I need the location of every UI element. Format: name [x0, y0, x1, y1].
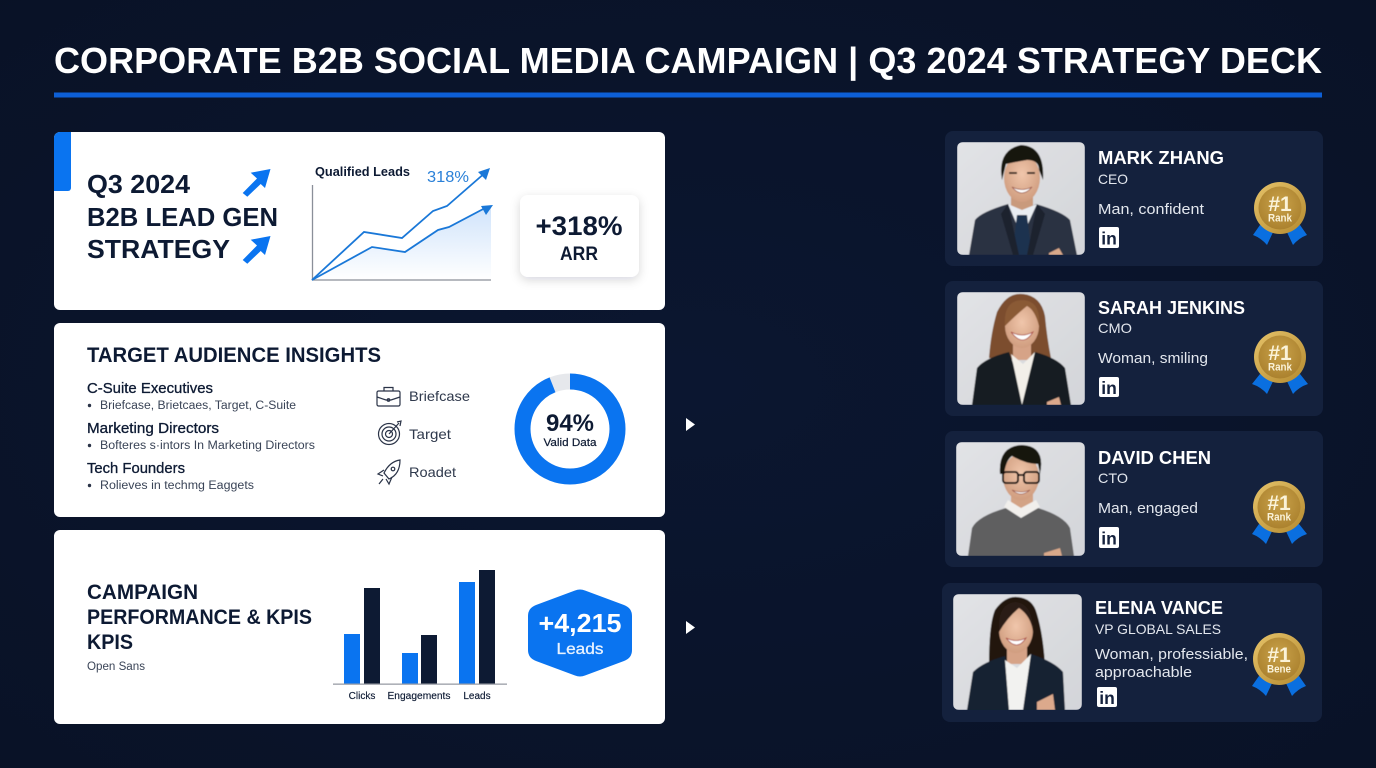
role: CTO: CTO	[1098, 470, 1128, 486]
description: Woman, smiling	[1098, 350, 1208, 367]
heading: strategy: B2B LEAD GEN	[87, 202, 278, 232]
icon: LinkedIn: in	[1101, 378, 1117, 398]
bar chart	[333, 570, 507, 702]
heading: campaign performance	[87, 581, 312, 654]
badge: rank medal: #1	[1268, 342, 1292, 365]
heading: campaign performance: CAMPAIGN	[87, 581, 198, 604]
icon: briefcase	[377, 388, 400, 406]
badge: rank medal	[1252, 481, 1307, 544]
role: VP Global Sales: VP GLOBAL SALES	[1095, 621, 1221, 637]
badge: rank medal: #1	[1267, 644, 1291, 667]
accent tab	[54, 132, 71, 191]
panel: target audience insights	[54, 323, 665, 517]
badge: rank medal: Bene	[1267, 664, 1291, 676]
name: David Chen: DAVID CHEN	[1098, 447, 1211, 468]
audience list: Marketing Directors	[87, 421, 219, 437]
icon: rocket	[378, 460, 400, 484]
panel: Elena Vance	[942, 583, 1322, 722]
portrait: Sarah Jenkins	[957, 292, 1085, 405]
heading: campaign performance: PERFORMANCE & KPIS	[87, 606, 312, 629]
icon: up arrow 2	[243, 236, 270, 264]
donut chart: 94% valid data: Valid Data	[544, 437, 597, 449]
role: CEO: CEO	[1098, 171, 1128, 187]
heading: target audience: TARGET AUDIENCE INSIGHTS	[87, 344, 381, 367]
name: Sarah Jenkins: SARAH JENKINS	[1098, 297, 1245, 318]
badge: rank medal: Rank	[1268, 212, 1293, 224]
description: approachable	[1095, 664, 1192, 681]
line chart: qualified leads	[312, 165, 493, 280]
badge: rank medal	[1252, 633, 1306, 696]
heading: strategy: Q3 2024	[87, 169, 191, 199]
icon: LinkedIn: in	[1099, 688, 1115, 708]
heading: strategy	[87, 169, 278, 264]
badge: rank medal: Rank	[1267, 512, 1292, 524]
icon: LinkedIn: in	[1101, 528, 1117, 548]
audience list: Bofteres s·intors In Marketing Directors	[100, 440, 315, 452]
description	[1095, 646, 1248, 681]
title: CORPORATE B2B SOCIAL MEDIA CAMPAIGN | Q3 2024 STRATEGY DECK	[54, 40, 1322, 82]
callout: +318% ARR: +318%	[536, 211, 622, 241]
label: target: Target	[409, 426, 451, 442]
badge: rank medal: Rank	[1268, 362, 1293, 374]
badge: rank medal	[1253, 182, 1307, 245]
audience list: Briefcase, Brietcaes, Target, C-Suite	[100, 400, 296, 412]
caption: open sans: Open Sans	[87, 661, 145, 673]
description: Woman, professiable,	[1095, 646, 1248, 663]
audience list	[87, 381, 315, 492]
description: Man, confident	[1098, 201, 1205, 218]
label: rocket: Roadet	[409, 464, 456, 480]
heading: strategy: STRATEGY	[87, 234, 230, 264]
arrow: bottom connector	[686, 621, 695, 634]
callout: +4,215 leads	[528, 590, 632, 676]
panel: Mark Zhang	[945, 131, 1323, 266]
label: briefcase: Briefcase	[409, 388, 470, 404]
portrait: Elena Vance	[953, 594, 1082, 710]
panel: David Chen	[945, 431, 1323, 567]
callout: +318% ARR	[520, 195, 639, 277]
badge: rank medal: #1	[1268, 193, 1292, 216]
bar chart: Leads	[463, 691, 491, 702]
name: Elena Vance: ELENA VANCE	[1095, 597, 1223, 618]
portrait: Mark Zhang	[957, 142, 1085, 255]
badge: rank medal: #1	[1267, 492, 1291, 515]
panel: Sarah Jenkins	[945, 281, 1323, 416]
icon: up arrow 1	[243, 169, 270, 197]
callout: +318% ARR: ARR	[560, 244, 598, 265]
audience list: Tech Founders	[87, 461, 185, 477]
callout: +4,215 leads: +4,215	[538, 608, 622, 638]
donut chart: 94% valid data: 94%	[546, 410, 594, 437]
icon: target	[378, 421, 401, 444]
donut chart: 94% valid data	[522, 382, 618, 476]
audience list: C-Suite Executives	[87, 381, 213, 397]
heading: campaign performance: KPIS	[87, 631, 133, 654]
description: Man, engaged	[1098, 500, 1198, 517]
callout: +4,215 leads: Leads	[556, 641, 604, 658]
name: Mark Zhang: MARK ZHANG	[1098, 147, 1224, 168]
portrait: David Chen	[956, 442, 1085, 556]
badge: rank medal	[1252, 331, 1308, 394]
panel: campaign performance	[54, 530, 665, 724]
panel: Q3 2024 lead gen strategy	[54, 132, 665, 310]
line chart: qualified leads: Qualified Leads	[315, 165, 410, 179]
bar chart: Clicks	[349, 691, 375, 702]
audience list: Rolieves in techmg Eaggets	[100, 480, 254, 492]
icon: LinkedIn: in	[1101, 228, 1117, 248]
arrow: top connector	[686, 418, 695, 431]
bar chart: Engagements	[388, 691, 450, 702]
role: CMO: CMO	[1098, 320, 1132, 336]
line chart: qualified leads: 318%	[427, 169, 469, 186]
